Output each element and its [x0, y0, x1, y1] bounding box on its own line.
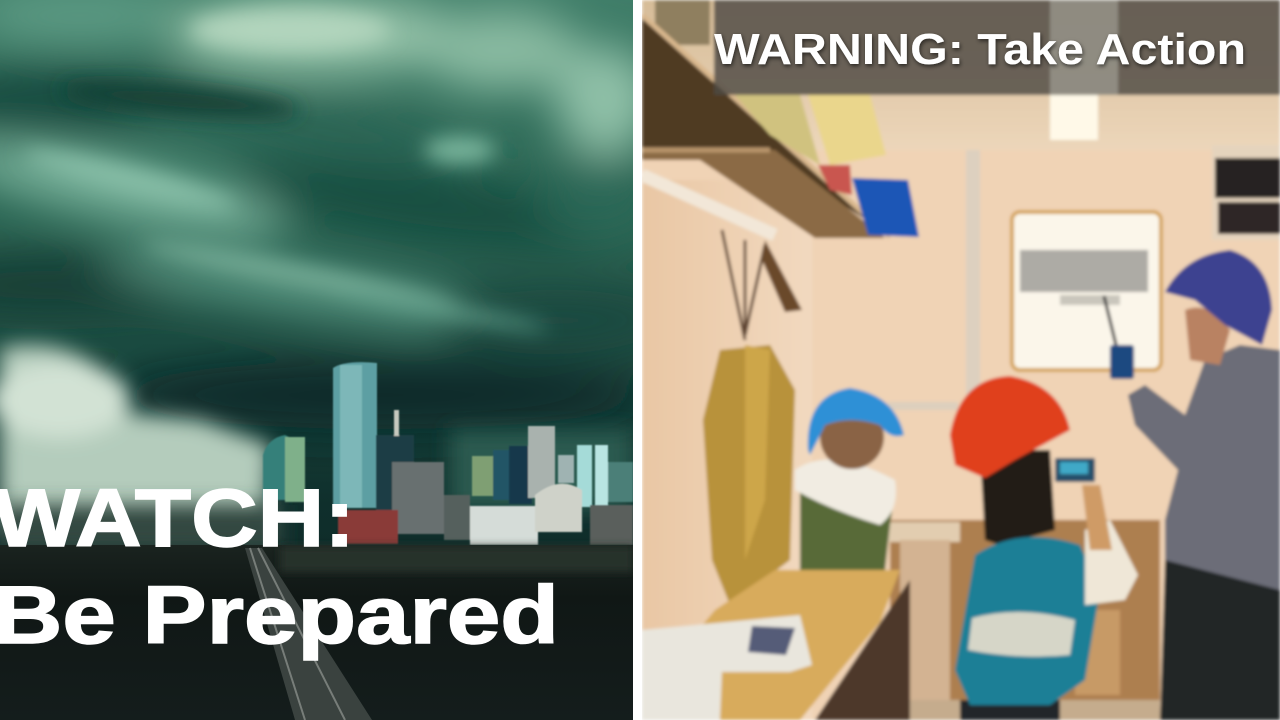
- right shelf: [1212, 145, 1280, 240]
- ground and highway: [0, 545, 633, 720]
- heading: watch: WATCH:: [0, 473, 355, 564]
- shelf with boxes: [642, 0, 919, 238]
- walls and ceiling: [642, 148, 1280, 720]
- heading: warning: WARNING: Take Action: [714, 25, 1246, 74]
- figure: adult with radio: [1104, 250, 1280, 720]
- pale horizon cloud: [0, 345, 270, 530]
- figure: child in blue helmet: [795, 388, 904, 570]
- whiteboard: [1012, 212, 1161, 370]
- title banner: [714, 0, 1280, 95]
- panel: watch storm scene: [0, 0, 680, 720]
- ceiling light: [1050, 95, 1098, 140]
- storm clouds: [0, 0, 680, 550]
- panel: warning shelter scene: [642, 0, 1280, 720]
- hanging yellow coat: [703, 230, 802, 605]
- figure: child in red helmet: [950, 376, 1138, 720]
- heading: watch: Be Prepared: [0, 570, 559, 661]
- city skyline: [263, 362, 633, 545]
- heading: watch: [0, 473, 559, 661]
- counter: [642, 520, 1160, 720]
